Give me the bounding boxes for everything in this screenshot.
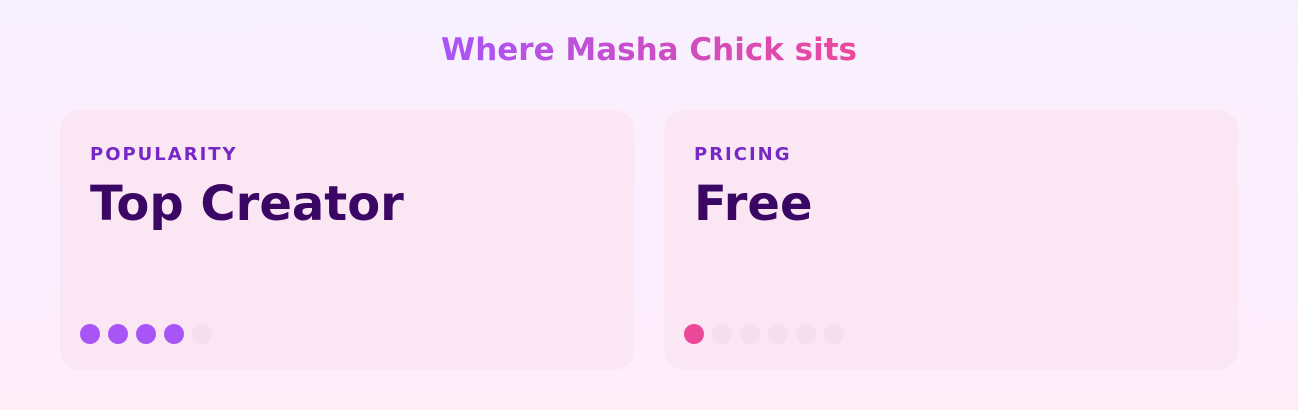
pricing label: PRICING <box>694 144 792 165</box>
panel: pricing <box>664 110 1238 370</box>
popularity rating dots <box>80 324 212 344</box>
popularity value: Top Creator <box>90 176 404 232</box>
pricing rating dots <box>684 324 844 344</box>
title: Where Masha Chick sits <box>441 32 857 68</box>
popularity label: POPULARITY <box>90 144 238 165</box>
panel: popularity <box>60 110 634 370</box>
pricing value: Free <box>694 176 812 232</box>
